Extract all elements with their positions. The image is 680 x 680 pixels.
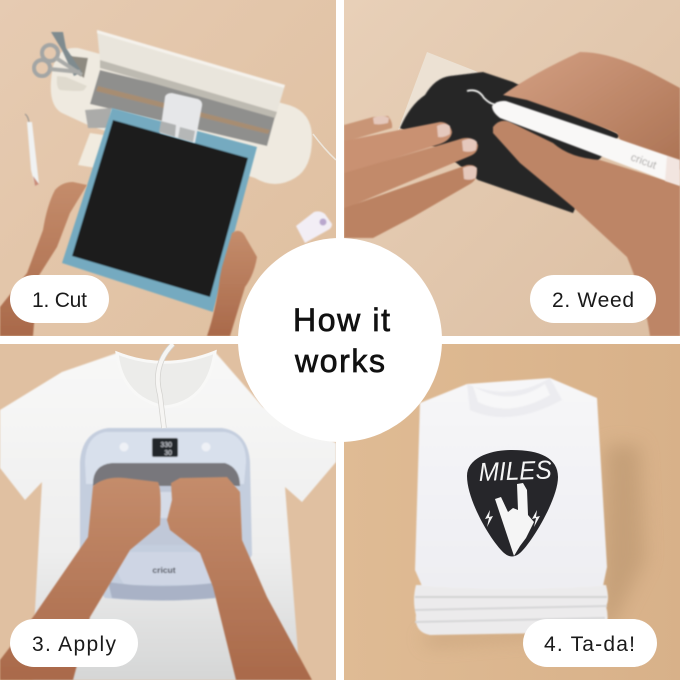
label: 4. Ta-da!: 4. Ta-da! — [544, 633, 635, 656]
left hand and arm — [0, 478, 161, 680]
label: 2. Weed: 2. Weed — [552, 289, 634, 312]
cutting mat with black vinyl — [62, 108, 257, 312]
heat press — [80, 428, 252, 600]
right hand index and palm above pen — [503, 52, 680, 170]
label: 3. Apply — [10, 619, 138, 667]
weeding tool — [25, 114, 39, 186]
label: 2. Weed — [530, 275, 656, 323]
label: 4. Ta-da! — [523, 619, 657, 667]
center circle — [238, 238, 442, 442]
press handle — [160, 492, 172, 518]
title: How it — [293, 302, 390, 338]
weeding pen — [467, 90, 680, 186]
rock hand — [495, 483, 534, 556]
title: works — [294, 343, 385, 379]
stack of t-shirts — [414, 378, 608, 635]
right hand thumb and wrist — [493, 121, 680, 336]
lightning bolts — [485, 510, 540, 527]
stack shadow — [420, 445, 645, 645]
guitar pick graphic — [467, 450, 558, 556]
transfer sheet — [398, 52, 478, 130]
right hand and arm — [167, 477, 312, 680]
left hand — [0, 182, 87, 336]
guitar pick graphic: MILES — [478, 454, 553, 487]
heat press: cricut — [152, 565, 176, 575]
heat press: 330 — [160, 442, 172, 449]
press display — [152, 438, 178, 457]
shirt collar — [117, 352, 215, 407]
small heat press — [296, 211, 332, 243]
cutting machine — [51, 30, 312, 184]
heat press: 30 — [164, 450, 172, 457]
black vinyl — [400, 72, 620, 213]
panel: step 4 ta-da — [344, 344, 680, 680]
weeding pen: cricut — [629, 152, 658, 172]
scissors and tools — [34, 32, 82, 76]
machine carriage — [159, 93, 202, 143]
white t-shirt — [0, 352, 336, 680]
left hand fingers — [344, 116, 478, 238]
panel: step 1 cut — [0, 0, 336, 336]
panel: step 3 apply — [0, 344, 336, 680]
title — [293, 302, 390, 379]
label: 1. Cut — [10, 275, 109, 323]
right hand — [207, 231, 257, 336]
label: 3. Apply: 3. Apply — [32, 633, 116, 656]
label: 1. Cut: 1. Cut — [32, 289, 87, 312]
panel: step 2 weed — [344, 0, 680, 336]
power cord — [158, 344, 173, 428]
